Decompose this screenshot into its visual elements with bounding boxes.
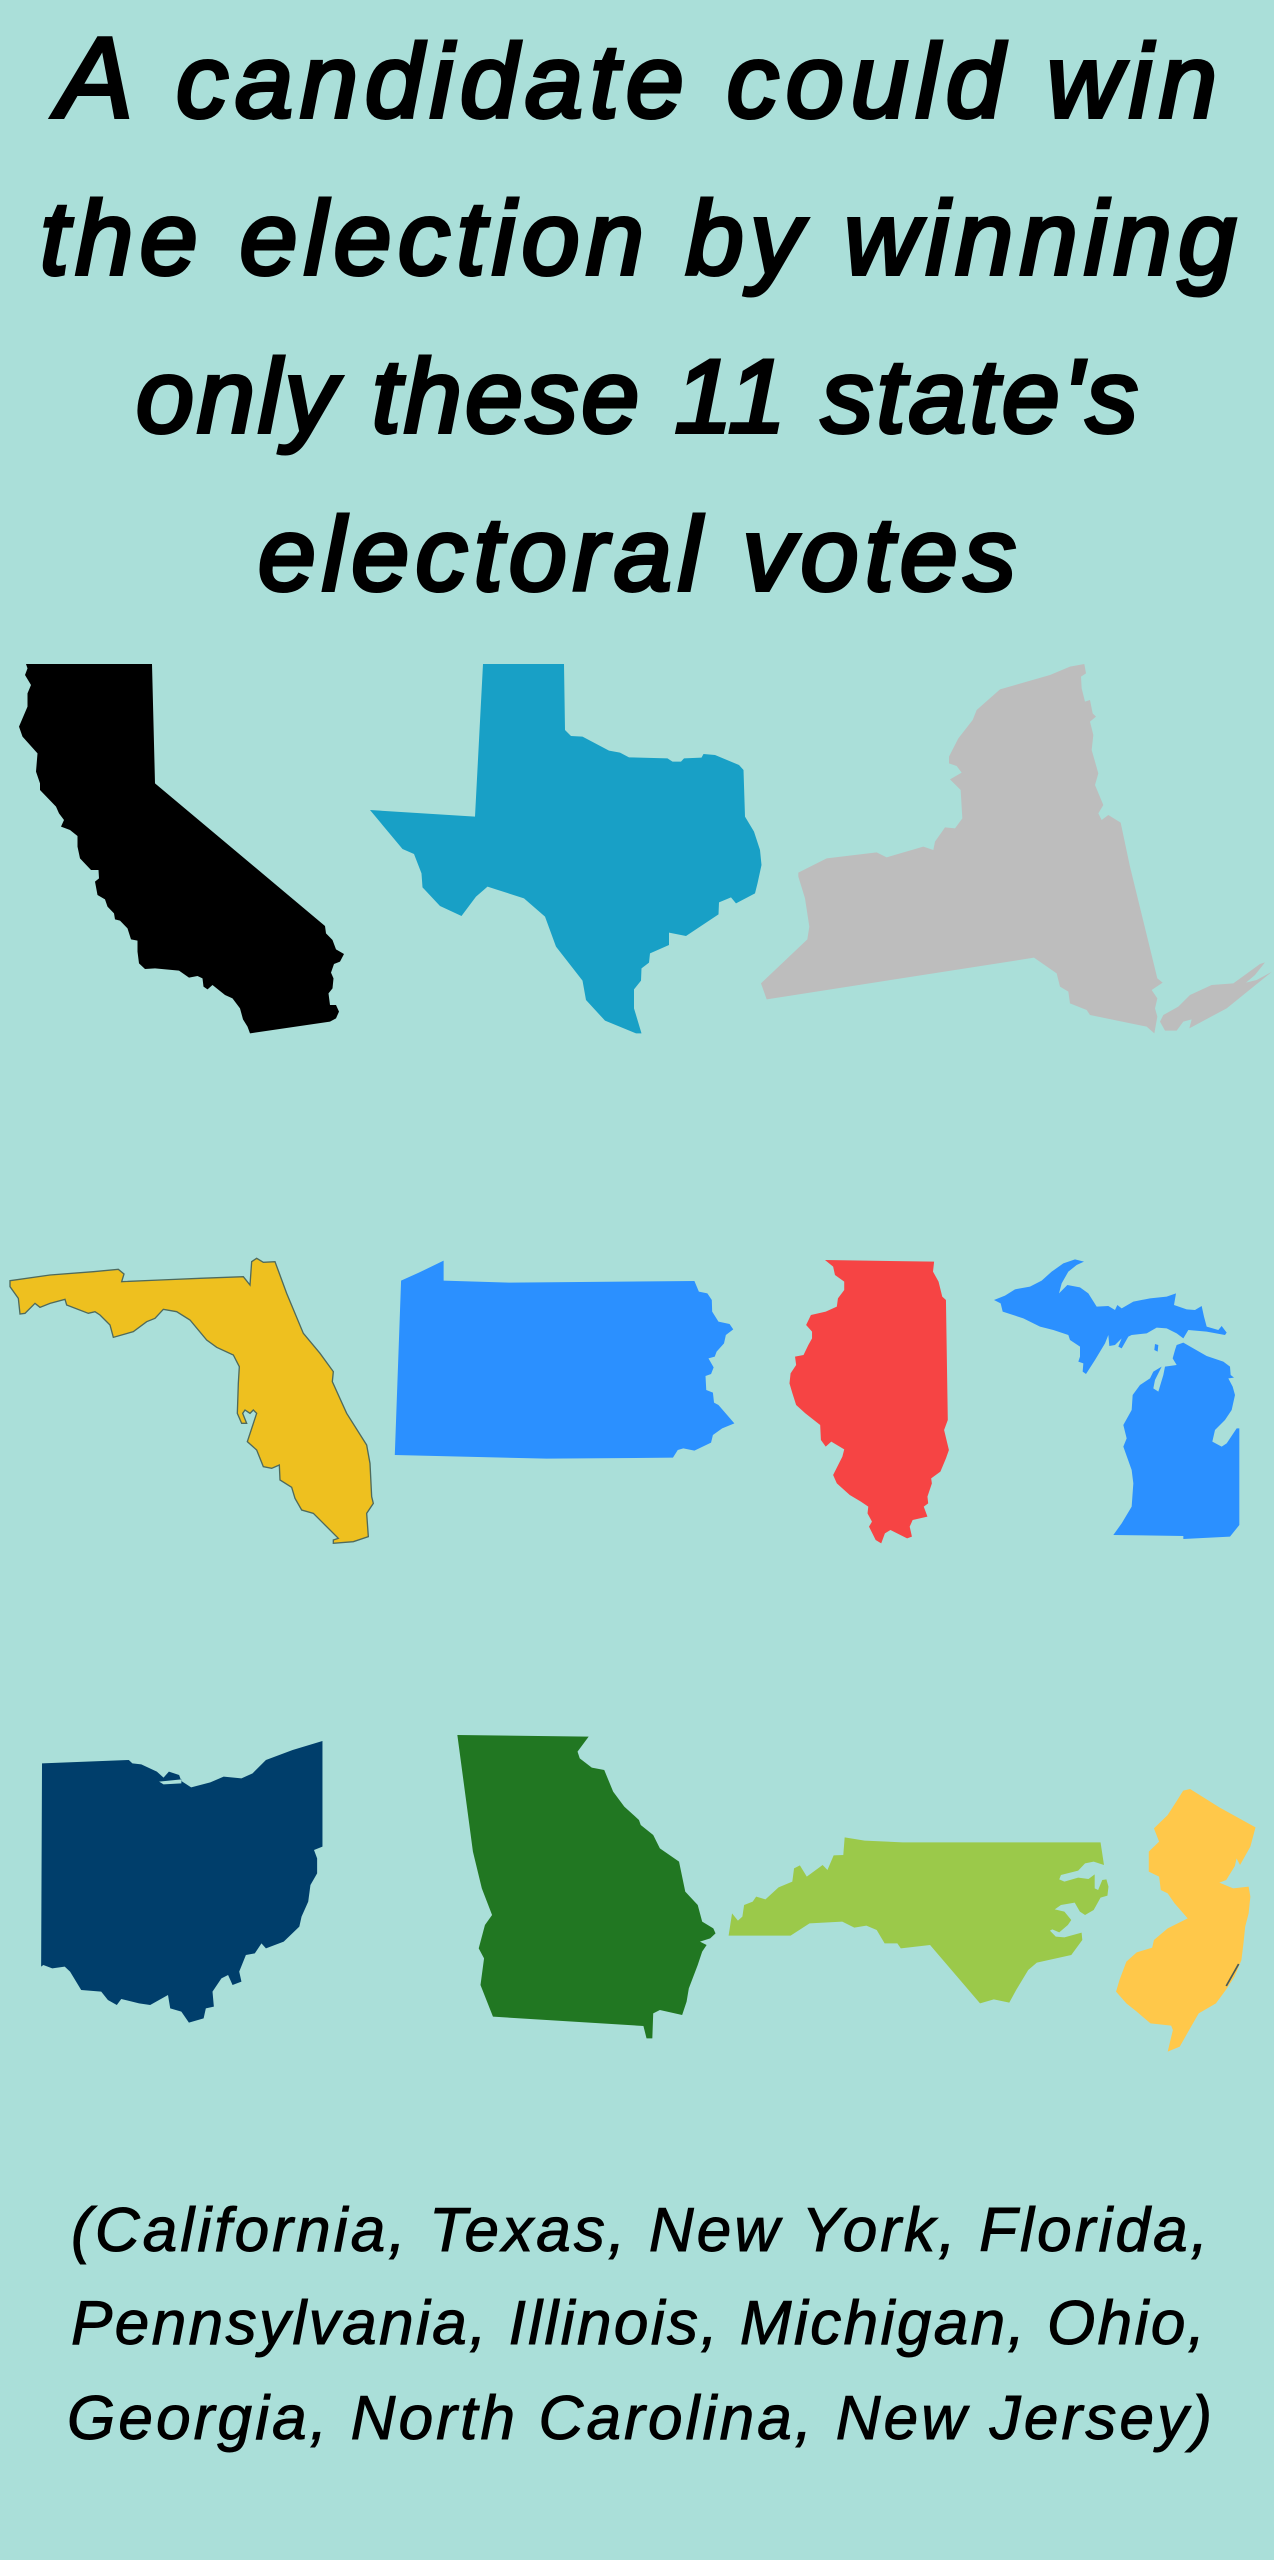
title: only these 11 state's — [136, 339, 1138, 455]
icon: Georgia — [457, 1735, 716, 2038]
icon: Pennsylvania — [395, 1261, 734, 1459]
list of states: (California, Texas, New York, Florida, — [71, 2196, 1208, 2265]
icon: Ohio — [41, 1741, 322, 2023]
icon: New Jersey — [1116, 1789, 1256, 2052]
icon: Illinois — [789, 1260, 949, 1543]
icon: Michigan — [994, 1259, 1239, 1539]
list of states: Georgia, North Carolina, New Jersey) — [67, 2384, 1212, 2453]
title: the election by winning — [40, 181, 1236, 297]
icon: Florida — [10, 1258, 373, 1543]
list of states: Pennsylvania, Illinois, Michigan, Ohio, — [71, 2289, 1205, 2358]
icon: North Carolina — [729, 1837, 1108, 2003]
list of states — [67, 2196, 1212, 2453]
title — [40, 15, 1236, 613]
title: electoral votes — [258, 497, 1016, 613]
icon: California — [19, 664, 344, 1033]
icon: New York — [761, 664, 1272, 1033]
title: A candidate could win — [51, 15, 1217, 142]
icon: Texas — [370, 664, 762, 1033]
